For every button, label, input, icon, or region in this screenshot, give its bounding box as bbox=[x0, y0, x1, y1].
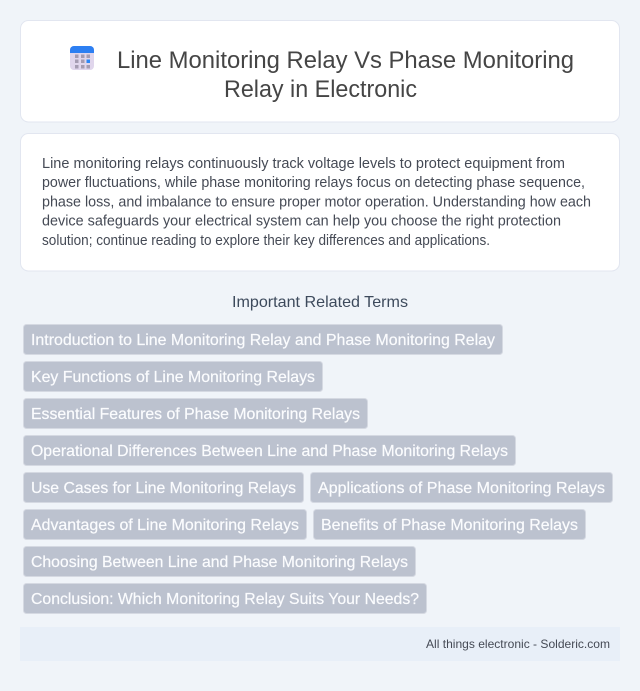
tag: introduction bbox=[24, 324, 502, 354]
tag: use cases bbox=[24, 472, 304, 502]
tag: applications bbox=[310, 472, 612, 502]
tag: use cases: Use Cases for Line Monitoring Relays bbox=[31, 480, 296, 497]
tag: applications: Applications of Phase Monitoring Relays bbox=[318, 480, 605, 497]
tag: introduction: Introduction to Line Monitoring Relay and Phase Monitoring Relay bbox=[31, 332, 495, 349]
tag: conclusion: Conclusion: Which Monitoring Relay Suits Your Needs? bbox=[31, 591, 419, 608]
panel: introduction text: solution; continue reading to explore their key differences and applications. bbox=[42, 233, 490, 249]
tag: benefits bbox=[314, 510, 586, 540]
title: Relay in Electronic bbox=[224, 76, 417, 103]
tag: choosing: Choosing Between Line and Phase Monitoring Relays bbox=[31, 554, 408, 571]
tag: essential features bbox=[24, 398, 368, 428]
tag: conclusion bbox=[24, 584, 426, 614]
panel: introduction text: Line monitoring relays continuously track voltage levels to protect equipment from bbox=[42, 156, 565, 172]
panel: introduction text: power fluctuations, while phase monitoring relays focus on detecting phase sequence, bbox=[42, 175, 585, 191]
title: Line Monitoring Relay Vs Phase Monitoring bbox=[117, 47, 574, 74]
panel: introduction text: phase loss, and imbalance to ensure proper motor operation. Understanding how each bbox=[42, 194, 591, 210]
title bbox=[117, 47, 574, 103]
tag: key functions bbox=[24, 362, 322, 392]
tag: benefits: Benefits of Phase Monitoring Relays bbox=[321, 517, 578, 534]
tag: advantages: Advantages of Line Monitoring Relays bbox=[31, 517, 299, 534]
heading: important related terms: Important Related Terms bbox=[232, 294, 408, 311]
tag: operational differences: Operational Differences Between Line and Phase Monitoring Relays bbox=[31, 443, 508, 460]
panel: header card bbox=[20, 20, 620, 122]
icon: calendar bbox=[70, 46, 94, 70]
tag: key functions: Key Functions of Line Monitoring Relays bbox=[31, 369, 315, 386]
footer: All things electronic - Solderic.com bbox=[426, 637, 610, 651]
tag: essential features: Essential Features of Phase Monitoring Relays bbox=[31, 406, 360, 423]
tag: operational differences bbox=[24, 436, 516, 466]
tag: advantages bbox=[24, 510, 306, 540]
tag: choosing bbox=[24, 546, 416, 576]
tag list bbox=[24, 324, 612, 614]
panel: introduction text: device safeguards your electrical system can help you choose the right protection bbox=[42, 214, 561, 230]
footer bbox=[20, 627, 620, 661]
panel: introduction text bbox=[20, 134, 620, 271]
